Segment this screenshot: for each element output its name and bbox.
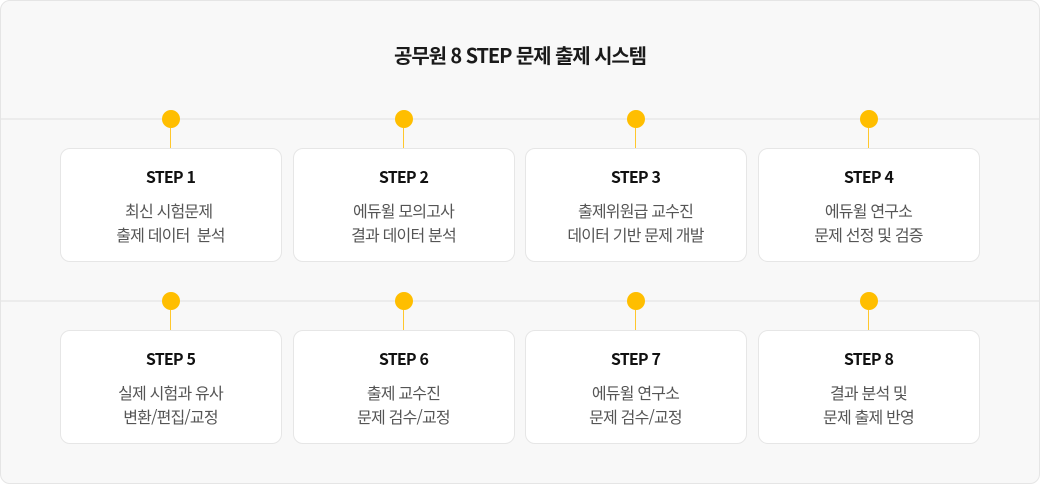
step 6 heading: STEP 6: [379, 346, 428, 370]
step 6 description: 출제 교수진 문제 검수/교정: [357, 380, 450, 428]
step 3 description: 출제위원급 교수진 데이터 기반 문제 개발: [567, 198, 704, 246]
panel: step 6: [293, 330, 515, 444]
step 8 description: 결과 분석 및 문제 출제 반영: [823, 380, 914, 428]
step 1 heading: STEP 1: [146, 164, 195, 188]
step 7 description: 에듀윌 연구소 문제 검수/교정: [589, 380, 682, 428]
icon: connector dot 6: [395, 292, 413, 310]
title: 공무원 8 STEP 문제 출제 시스템: [394, 40, 646, 69]
panel: step 4: [758, 148, 980, 262]
panel: step 8: [758, 330, 980, 444]
icon: connector dot 8: [860, 292, 878, 310]
step 4 heading: STEP 4: [844, 164, 893, 188]
step 4 description: 에듀윌 연구소 문제 선정 및 검증: [814, 198, 923, 246]
panel: step 3: [525, 148, 747, 262]
step 5 description: 실제 시험과 유사 변환/편집/교정: [118, 380, 223, 428]
panel: step 2: [293, 148, 515, 262]
icon: connector dot 1: [162, 110, 180, 128]
panel: step 1: [60, 148, 282, 262]
panel: step 5: [60, 330, 282, 444]
icon: connector dot 7: [627, 292, 645, 310]
step 8 heading: STEP 8: [844, 346, 893, 370]
icon: connector dot 4: [860, 110, 878, 128]
step 2 description: 에듀윌 모의고사 결과 데이터 분석: [351, 198, 456, 246]
step 3 heading: STEP 3: [611, 164, 660, 188]
step 1 description: 최신 시험문제 출제 데이터 분석: [116, 198, 225, 246]
step 5 heading: STEP 5: [146, 346, 195, 370]
icon: connector dot 3: [627, 110, 645, 128]
icon: connector dot 2: [395, 110, 413, 128]
icon: connector dot 5: [162, 292, 180, 310]
step 2 heading: STEP 2: [379, 164, 428, 188]
step 7 heading: STEP 7: [611, 346, 660, 370]
panel: step 7: [525, 330, 747, 444]
